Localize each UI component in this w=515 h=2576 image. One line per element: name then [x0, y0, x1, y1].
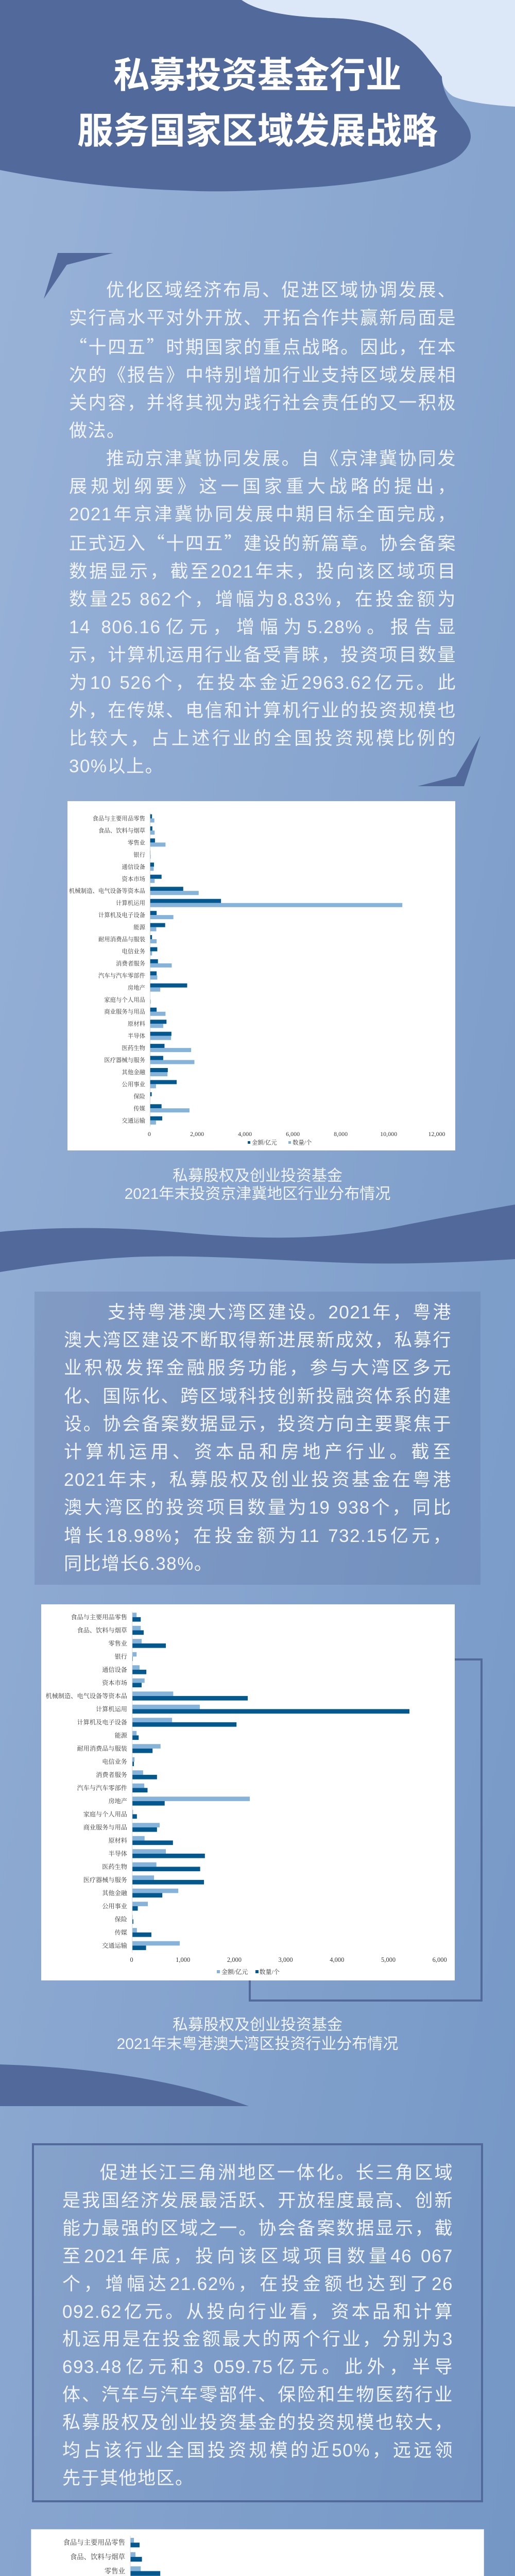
category labels: [69, 815, 146, 1124]
legend: 数量/个: [293, 1139, 312, 1146]
category labels: 交通运输: [122, 1117, 146, 1124]
text block: Greater Bay Area: 设。协会备案数据显示，投资方向主要聚焦于: [64, 1414, 452, 1434]
category labels: 计算机运用: [96, 1705, 127, 1713]
axis ticks: [130, 1956, 447, 1963]
category labels: 食品与主要用品零售: [92, 815, 145, 822]
axis ticks: 2,000: [190, 1130, 204, 1138]
text block: intro and Beijing-Tianjin-Hebei: 优化区域经济布局、促进区域协调发展、: [106, 280, 456, 300]
text block: Greater Bay Area: 支持粤港澳大湾区建设。2021年，粤港: [108, 1302, 452, 1323]
axis ticks: 10,000: [380, 1130, 397, 1138]
category labels: 保险: [133, 1093, 145, 1100]
category labels: 银行: [133, 851, 146, 858]
text block: intro and Beijing-Tianjin-Hebei: 示，计算机运用行业备受青睐，投资项目数量: [69, 645, 456, 665]
category labels: [36, 2538, 126, 2576]
text block: intro and Beijing-Tianjin-Hebei: 30%以上。: [69, 756, 164, 776]
category labels: 原材料: [128, 1020, 146, 1027]
category labels: 房地产: [128, 984, 145, 991]
category labels: 食品与主要用品零售: [63, 2538, 125, 2547]
text block: Yangtze River Delta: 先于其他地区。: [62, 2468, 194, 2488]
caption: chart 2: [117, 2016, 398, 2053]
category labels: 计算机及电子设备: [77, 1718, 127, 1726]
text block: intro and Beijing-Tianjin-Hebei: [69, 280, 456, 776]
category labels: 耐用消费品与服装: [77, 1744, 127, 1752]
category labels: 公用事业: [102, 1902, 127, 1910]
axis ticks: 0: [148, 1130, 151, 1138]
axis ticks: 5,000: [381, 1956, 396, 1963]
text block: intro and Beijing-Tianjin-Hebei: 正式迈入“十四五”建设的新篇章。协会备案: [69, 529, 456, 555]
axis ticks: 4,000: [330, 1956, 344, 1963]
category labels: 医药生物: [102, 1863, 127, 1870]
bars: count: [132, 1617, 409, 1950]
legend: [217, 1968, 280, 1975]
category labels: 零售业: [108, 1639, 127, 1647]
wave band: [0, 1205, 515, 1272]
icon: top-left corner mark: [44, 253, 113, 299]
text block: intro and Beijing-Tianjin-Hebei: 实行高水平对外开放、开拓合作共赢新局面是: [69, 308, 456, 328]
axis ticks: 12,000: [428, 1130, 445, 1138]
text block: Yangtze River Delta: 092.62亿元。从投向行业看，资本品和计算: [62, 2302, 453, 2322]
text block: Yangtze River Delta: 能力最强的区域之一。协会备案数据显示，截: [62, 2218, 453, 2239]
axis ticks: 4,000: [238, 1130, 252, 1138]
text block: intro and Beijing-Tianjin-Hebei: 外，在传媒、电信和计算机行业的投资规模也: [69, 701, 456, 721]
category labels: 传媒: [133, 1105, 146, 1112]
category labels: 公用事业: [122, 1080, 146, 1088]
icon: bottom-right corner mark: [418, 736, 480, 786]
text block: intro and Beijing-Tianjin-Hebei: 推动京津冀协同发展。自《京津冀协同发: [106, 449, 456, 469]
title: [77, 46, 438, 154]
title: 私募投资基金行业: [113, 46, 402, 98]
bars: count: [131, 2543, 409, 2576]
legend: [248, 1139, 312, 1146]
text block: intro and Beijing-Tianjin-Hebei: “十四五”时期国家的重点战略。因此，在本: [69, 333, 456, 359]
axis ticks: 0: [130, 1956, 133, 1963]
category labels: 房地产: [108, 1797, 127, 1805]
caption: chart 1: 2021年末投资京津冀地区行业分布情况: [125, 1185, 390, 1202]
category labels: 食品、饮料与烟草: [77, 1626, 127, 1634]
text block: Greater Bay Area: 澳大湾区建设不断取得新进展新成效，私募行: [64, 1330, 452, 1350]
text block: intro and Beijing-Tianjin-Hebei: 为10 526个，在投本金近2963.62亿元。此: [69, 673, 456, 693]
top decoration: title blob: [0, 0, 515, 192]
outline frame behind chart 2: [249, 1658, 483, 2002]
text block: Yangtze River Delta: 至2021年底，投向该区域项目数量46 067: [62, 2246, 453, 2266]
category labels: 机械制造、电气设备等资本品: [69, 887, 145, 894]
panel: Greater Bay Area: [35, 1292, 480, 1585]
caption: chart 1: [125, 1167, 390, 1202]
category labels: 资本市场: [122, 875, 145, 883]
text block: intro and Beijing-Tianjin-Hebei: 关内容，并将其视为践行社会责任的又一积极: [69, 393, 456, 413]
category labels: 商业服务与用品: [104, 1008, 145, 1015]
text block: Yangtze River Delta: 机运用是在投金额最大的两个行业，分别为3: [62, 2329, 453, 2349]
text block: Yangtze River Delta: 私募股权及创业投资基金的投资规模也较大，: [62, 2413, 453, 2433]
axis ticks: 6,000: [433, 1956, 447, 1963]
axis ticks: 3,000: [279, 1956, 293, 1963]
category labels: 通信设备: [102, 1666, 127, 1673]
category labels: 汽车与汽车零部件: [77, 1784, 127, 1792]
category labels: 计算机及电子设备: [98, 911, 146, 919]
text block: Yangtze River Delta: 是我国经济发展最活跃、开放程度最高、创新: [62, 2191, 453, 2211]
panel: Yangtze River Delta: [32, 2143, 483, 2502]
bars: amount: [132, 1613, 250, 1945]
category labels: 能源: [133, 924, 146, 931]
wave corner: [0, 2064, 249, 2106]
text block: intro and Beijing-Tianjin-Hebei: 次的《报告》中特别增加行业支持区域发展相: [69, 365, 456, 385]
legend: 金额/亿元: [221, 1968, 248, 1975]
bars: amount: [131, 2538, 219, 2576]
category labels: 耐用消费品与服装: [98, 936, 145, 943]
text block: Greater Bay Area: 计算机运用、资本品和房地产行业。截至: [64, 1442, 452, 1462]
axis ticks: 8,000: [334, 1130, 348, 1138]
category labels: 汽车与汽车零部件: [98, 972, 146, 979]
category labels: 医药生物: [122, 1044, 145, 1052]
category labels: 食品、饮料与烟草: [70, 2552, 125, 2561]
text block: Yangtze River Delta: 个，增幅达21.62%，在投金额也达到了26: [62, 2274, 453, 2294]
bar chart: Beijing-Tianjin-Hebei: [67, 801, 455, 1150]
category labels: 电信业务: [102, 1758, 127, 1765]
category labels: 机械制造、电气设备等资本品: [46, 1692, 127, 1700]
text block: intro and Beijing-Tianjin-Hebei: 比较大，占上述行业的全国投资规模比例的: [69, 728, 456, 749]
category labels: 消费者服务: [116, 960, 146, 967]
bars: count: [150, 818, 402, 1125]
category labels: 医疗器械与服务: [104, 1056, 146, 1063]
text block: Greater Bay Area: 同比增长6.38%。: [64, 1554, 213, 1574]
text block: Greater Bay Area: 2021年末，私募股权及创业投资基金在粤港: [64, 1470, 452, 1490]
category labels: 零售业: [128, 839, 146, 846]
bars: amount: [150, 814, 221, 1121]
category labels: 半导体: [108, 1850, 127, 1857]
text block: Greater Bay Area: 化、国际化、跨区域科技创新投融资体系的建: [64, 1386, 452, 1406]
category labels: 商业服务与用品: [83, 1823, 127, 1831]
text block: Yangtze River Delta: 693.48亿元和3 059.75亿元。此外，半导: [62, 2357, 453, 2377]
text block: Greater Bay Area: [64, 1302, 452, 1574]
title: 服务国家区域发展战略: [77, 102, 438, 154]
text block: Yangtze River Delta: [62, 2163, 453, 2488]
category labels: 医疗器械与服务: [83, 1876, 127, 1884]
category labels: 食品、饮料与烟草: [98, 827, 145, 834]
category labels: [46, 1613, 128, 1950]
text block: intro and Beijing-Tianjin-Hebei: 14 806.16亿元，增幅为5.28%。报告显: [69, 617, 456, 637]
category labels: 消费者服务: [96, 1771, 127, 1778]
text block: Greater Bay Area: 澳大湾区的投资项目数量为19 938个，同比: [64, 1498, 452, 1518]
legend: 数量/个: [260, 1968, 280, 1975]
category labels: 银行: [115, 1653, 127, 1660]
category labels: 半导体: [128, 1032, 146, 1040]
category labels: 家庭与个人用品: [104, 996, 145, 1003]
caption: chart 1: 私募股权及创业投资基金: [173, 1167, 342, 1184]
category labels: 其他金融: [102, 1889, 128, 1897]
axis ticks: [148, 1130, 445, 1138]
caption: chart 2: 私募股权及创业投资基金: [173, 2016, 342, 2033]
text block: Greater Bay Area: 业积极发挥金融服务功能，参与大湾区多元: [64, 1358, 452, 1378]
axis ticks: 6,000: [286, 1130, 300, 1138]
category labels: 零售业: [105, 2567, 126, 2575]
category labels: 食品与主要用品零售: [71, 1613, 127, 1621]
category labels: 原材料: [108, 1836, 127, 1844]
text block: Yangtze River Delta: 均占该行业全国投资规模的近50%，远远领: [62, 2441, 453, 2461]
text block: intro and Beijing-Tianjin-Hebei: 数据显示，截至2021年末，投向该区域项目: [69, 562, 456, 582]
text block: intro and Beijing-Tianjin-Hebei: 展规划纲要》这一国家重大战略的提出，: [69, 477, 456, 497]
axis ticks: 2,000: [227, 1956, 242, 1963]
category labels: 传媒: [115, 1928, 127, 1936]
category labels: 计算机运用: [116, 900, 145, 907]
text block: intro and Beijing-Tianjin-Hebei: 数量25 862个，增幅为8.83%，在投金额为: [69, 589, 456, 609]
category labels: 资本市场: [102, 1679, 127, 1687]
text block: Yangtze River Delta: 体、汽车与汽车零部件、保险和生物医药行业: [62, 2385, 453, 2405]
bar chart: Yangtze River Delta: [31, 2529, 484, 2576]
category labels: 通信设备: [122, 863, 146, 870]
text block: Greater Bay Area: 增长18.98%；在投金额为11 732.15亿元，: [64, 1526, 452, 1546]
text block: intro and Beijing-Tianjin-Hebei: 做法。: [69, 421, 126, 441]
category labels: 家庭与个人用品: [83, 1810, 127, 1818]
caption: chart 2: 2021年末粤港澳大湾区投资行业分布情况: [117, 2036, 398, 2053]
category labels: 其他金融: [122, 1069, 146, 1076]
text block: Yangtze River Delta: 促进长江三角洲地区一体化。长三角区域: [100, 2163, 453, 2183]
category labels: 电信业务: [122, 948, 146, 955]
text block: intro and Beijing-Tianjin-Hebei: 2021年京津冀协同发展中期目标全面完成，: [69, 504, 456, 524]
category labels: 交通运输: [102, 1941, 127, 1950]
bar chart: Greater Bay Area: [41, 1604, 455, 1980]
legend: 金额/亿元: [252, 1139, 277, 1146]
axis ticks: 1,000: [176, 1956, 190, 1963]
category labels: 保险: [115, 1916, 127, 1923]
category labels: 能源: [115, 1731, 128, 1739]
